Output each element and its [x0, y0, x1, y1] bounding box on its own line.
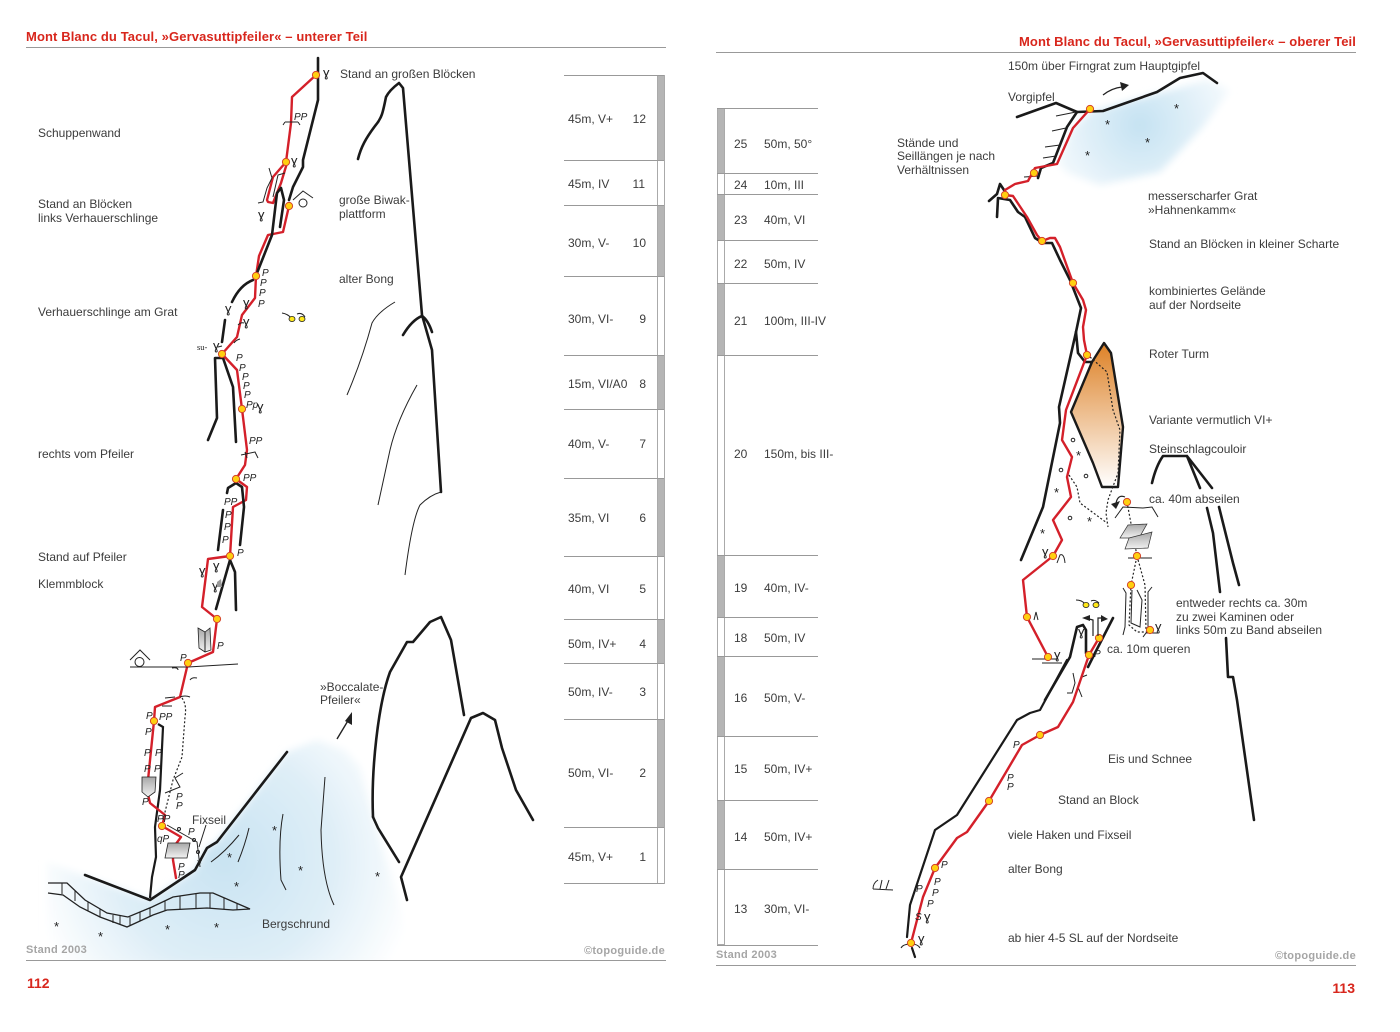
left page piton and sling symbols: Pp [246, 400, 259, 411]
left pitch table: 7 [639, 437, 646, 451]
left page labels: Pfeiler« [320, 693, 361, 707]
right pitch table: 24 [734, 178, 748, 192]
right page labels: zu zwei Kaminen oder [1176, 610, 1294, 624]
left page piton and sling symbols: P [225, 510, 232, 521]
right pitch table: 30m, VI- [764, 902, 809, 916]
right pitch table: 150m, bis III- [764, 447, 833, 461]
left pitch table: 2 [639, 766, 646, 780]
left page labels: links Verhauerschlinge [38, 211, 158, 225]
right page piton and sling symbols: P [1013, 740, 1020, 751]
left page footer: Stand 2003 [26, 944, 87, 956]
right pitch table: 14 [734, 830, 748, 844]
snow field: right page [1058, 80, 1230, 185]
snow stars left: * [197, 856, 202, 871]
right pitch table: 15 [734, 762, 748, 776]
left page piton and sling symbols: P [188, 827, 195, 838]
snow stars left: * [375, 869, 380, 884]
right page labels [897, 59, 1339, 945]
gray rock blocks left [142, 579, 222, 858]
left page piton and sling symbols: P [155, 748, 162, 759]
left page footer [26, 944, 666, 991]
left page labels: Verhauerschlinge am Grat [38, 305, 178, 319]
right pitch table: 18 [734, 631, 748, 645]
right pitch table: 50m, IV+ [764, 762, 812, 776]
right pitch table: 25 [734, 137, 748, 151]
left page labels: plattform [339, 207, 386, 221]
arrows right page [1082, 82, 1129, 636]
right page labels: alter Bong [1008, 862, 1063, 876]
left page belay stations [150, 71, 320, 830]
left pitch table: 11 [633, 177, 645, 191]
orange tower [1071, 343, 1123, 487]
snow stars left: * [165, 922, 170, 937]
right pitch table: 40m, VI [764, 213, 805, 227]
left pitch table: 1 [639, 850, 646, 864]
right page piton and sling symbols: P [932, 888, 939, 899]
left pitch table: 50m, IV+ [568, 637, 616, 651]
right page piton and sling symbols: P [1007, 773, 1014, 784]
left page piton and sling symbols: PP [159, 712, 173, 723]
chimneys sketch [873, 507, 1158, 948]
right page labels: Vorgipfel [1008, 90, 1055, 104]
left pitch table: 40m, V- [568, 437, 609, 451]
left page piton and sling symbols: ɣ [257, 399, 264, 414]
snow stars and small pebbles right: * [1105, 117, 1110, 132]
left page piton and sling symbols: ɣ [213, 558, 220, 573]
left page piton and sling symbols: P [142, 797, 149, 808]
right page labels: auf der Nordseite [1149, 298, 1241, 312]
right page footer: Stand 2003 [716, 949, 777, 961]
right page piton and sling symbols: ɣ [1078, 624, 1085, 639]
right page labels: links 50m zu Band abseilen [1176, 623, 1322, 637]
left page labels: Schuppenwand [38, 126, 121, 140]
right page piton and sling symbols: P [1007, 782, 1014, 793]
left page piton and sling symbols: P [259, 288, 266, 299]
right page labels: »Hahnenkamm« [1148, 203, 1236, 217]
snow stars left: * [272, 823, 277, 838]
right pitch table: 50m, IV [764, 631, 805, 645]
left page piton and sling symbols: P [180, 653, 187, 664]
snow stars and small pebbles right: * [1087, 514, 1092, 529]
left pitch table: 8 [639, 377, 646, 391]
right pitch table [717, 108, 833, 946]
right page labels: ca. 10m queren [1107, 642, 1190, 656]
left page piton and sling symbols: P [146, 711, 153, 722]
snow stars and small pebbles right: * [1174, 101, 1179, 116]
left page labels: Stand an Blöcken [38, 197, 132, 211]
right page piton and sling symbols [915, 544, 1162, 946]
left page labels: Klemmblock [38, 577, 104, 591]
left page piton and sling symbols: qP [157, 834, 170, 845]
right page piton and sling symbols: P [941, 860, 948, 871]
right pitch table: 50m, IV [764, 257, 805, 271]
right pitch table: 100m, III-IV [764, 314, 826, 328]
left pitch table: 50m, VI- [568, 766, 613, 780]
snow stars left: * [298, 863, 303, 878]
left pitch table: 5 [639, 582, 646, 596]
right page labels: entweder rechts ca. 30m [1176, 596, 1307, 610]
left page labels [38, 67, 475, 931]
left page piton and sling symbols: PP [224, 497, 238, 508]
right route red line [911, 109, 1099, 943]
left page labels: »Boccalate- [320, 680, 383, 694]
left page piton and sling symbols: P [144, 748, 151, 759]
right page footer [716, 949, 1356, 996]
left page labels: Stand an großen Blöcken [340, 67, 475, 81]
left page piton and sling symbols: P [176, 801, 183, 812]
right page labels: viele Haken und Fixseil [1008, 828, 1131, 842]
right pitch table: 16 [734, 691, 748, 705]
right page labels: ca. 40m abseilen [1149, 492, 1240, 506]
right page piton and sling symbols: ɣ [1054, 647, 1061, 662]
left page labels: Bergschrund [262, 917, 330, 931]
snow stars and small pebbles right [1040, 101, 1179, 541]
left pitch table [564, 75, 664, 884]
left page piton and sling symbols: ɣ [213, 338, 220, 353]
right page piton and sling symbols: P [1094, 649, 1101, 660]
snow field: left page [47, 740, 412, 965]
snow stars and small pebbles right: * [1076, 448, 1081, 463]
left page piton and sling symbols [142, 65, 330, 881]
right page piton and sling symbols: P [934, 877, 941, 888]
snow stars and small pebbles right: * [1085, 148, 1090, 163]
right page footer: 113 [1332, 980, 1355, 996]
left page labels: rechts vom Pfeiler [38, 447, 134, 461]
left page piton and sling symbols: PP [157, 814, 171, 825]
left page piton and sling symbols: ɣ [291, 153, 298, 168]
right pitch table: 22 [734, 257, 748, 271]
right pitch table: 21 [734, 314, 748, 328]
right page piton and sling symbols: S [915, 912, 922, 923]
left page piton and sling symbols: P [222, 535, 229, 546]
left page piton and sling symbols: P [224, 522, 231, 533]
snow stars left: * [227, 850, 232, 865]
left pitch table: 35m, VI [568, 511, 609, 525]
snow stars left [54, 823, 380, 944]
right page labels: messerscharfer Grat [1148, 189, 1258, 203]
left pitch table: 6 [639, 511, 646, 525]
left page piton and sling symbols: ɣ [225, 301, 232, 316]
snow stars and small pebbles right: * [1145, 135, 1150, 150]
left page piton and sling symbols: P [260, 278, 267, 289]
left page piton and sling symbols: ɣ [323, 65, 330, 80]
left page piton and sling symbols: PP [249, 436, 263, 447]
left page footer: 112 [27, 975, 50, 991]
left page labels: Stand auf Pfeiler [38, 550, 127, 564]
left page piton and sling symbols: P [244, 390, 251, 401]
right page labels: Verhältnissen [897, 163, 969, 177]
snow stars left: * [98, 929, 103, 944]
right page piton and sling symbols: ɣ [924, 909, 931, 924]
left page piton and sling symbols: P [262, 268, 269, 279]
snow stars left: * [214, 920, 219, 935]
left pitch table: 40m, VI [568, 582, 609, 596]
right page piton and sling symbols: ɣ [1155, 619, 1162, 634]
left pitch table: 10 [633, 236, 646, 250]
left pitch table: 4 [639, 637, 646, 651]
icon: bivouac left top [293, 191, 313, 207]
left page piton and sling symbols: P [178, 870, 185, 881]
icon: glasses right [1076, 600, 1099, 608]
snow stars left: * [234, 879, 239, 894]
left page piton and sling symbols: PP [243, 473, 257, 484]
dotted route variants [1069, 357, 1150, 632]
right pitch table: 19 [734, 581, 748, 595]
right pitch table: 50m, 50° [764, 137, 812, 151]
right page labels: 150m über Firngrat zum Hauptgipfel [1008, 59, 1200, 73]
right page labels: Stand an Block [1058, 793, 1140, 807]
left page piton and sling symbols: ɣ [212, 578, 219, 593]
left page piton and sling symbols: su- [197, 342, 208, 352]
left page piton and sling symbols: P [154, 764, 161, 775]
left page piton and sling symbols: ɣ [243, 295, 250, 310]
right pitch table: 40m, IV- [764, 581, 809, 595]
icon: glasses left [282, 313, 305, 322]
snow stars and small pebbles right: * [1040, 526, 1045, 541]
right page labels: Variante vermutlich VI+ [1149, 413, 1272, 427]
right page footer: ©topoguide.de [1275, 950, 1356, 962]
left pitch table: 30m, VI- [568, 312, 613, 326]
left page labels: alter Bong [339, 272, 394, 286]
right pitch table: 20 [734, 447, 748, 461]
left page rock lines along route [130, 58, 318, 867]
snow stars and small pebbles right: * [1054, 485, 1059, 500]
left page labels: Fixseil [192, 813, 226, 827]
right page piton and sling symbols: P [927, 899, 934, 910]
right page piton and sling symbols: ɣ [918, 931, 925, 946]
left page piton and sling symbols: ɣ [258, 207, 265, 222]
left page piton and sling symbols: P [258, 299, 265, 310]
left pitch table: 9 [639, 312, 646, 326]
left pitch table: 30m, V- [568, 236, 609, 250]
left page piton and sling symbols: ɣ [243, 314, 250, 329]
left pitch table: 15m, VI/A0 [568, 377, 628, 391]
left page piton and sling symbols: P [145, 727, 152, 738]
left page route: red line [147, 75, 316, 878]
right page piton and sling symbols: ɣ [1042, 544, 1049, 559]
icon: bivouac left bottom [130, 650, 150, 666]
arrow: Boccalate Pfeiler [337, 712, 352, 739]
left page labels: große Biwak- [339, 193, 410, 207]
left page piton and sling symbols: P [243, 381, 250, 392]
right page labels: Stände und [897, 136, 958, 150]
left page piton and sling symbols: PP [294, 112, 308, 123]
right page labels: ab hier 4-5 SL auf der Nordseite [1008, 931, 1179, 945]
right page labels: kombiniertes Gelände [1149, 284, 1266, 298]
left pitch table: 45m, IV [568, 177, 609, 191]
right pitch table: 23 [734, 213, 748, 227]
right page belay stations [907, 105, 1154, 947]
left page piton and sling symbols: P [178, 862, 185, 873]
right page labels: Seillängen je nach [897, 149, 995, 163]
right pitch table: 13 [734, 902, 748, 916]
right page labels: Roter Turm [1149, 347, 1209, 361]
left pitch table: 3 [639, 685, 646, 699]
right page labels: Stand an Blöcken in kleiner Scharte [1149, 237, 1339, 251]
right pitch table: 50m, IV+ [764, 830, 812, 844]
right page rock lines [907, 73, 1254, 957]
left pitch table: 45m, V+ [568, 850, 613, 864]
left page piton and sling symbols: P [217, 641, 224, 652]
right page piton and sling symbols: P [916, 884, 923, 895]
left page piton and sling symbols: P [239, 363, 246, 374]
right page labels: Steinschlagcouloir [1149, 442, 1246, 456]
left mountain outlines [211, 83, 533, 905]
left page piton and sling symbols: P [144, 764, 151, 775]
left page piton and sling symbols: P [237, 548, 244, 559]
gray rock blocks right [1120, 524, 1152, 549]
right pitch table: 10m, III [764, 178, 804, 192]
right pitch table: 50m, V- [764, 691, 805, 705]
snow stars left: * [54, 919, 59, 934]
left page footer: ©topoguide.de [584, 945, 665, 957]
glacier ridge and bergschrund [48, 724, 287, 927]
left page piton and sling symbols: ɣ [199, 563, 206, 578]
left page piton and sling symbols: P [176, 792, 183, 803]
left page piton and sling symbols: P [242, 372, 249, 383]
left page header: Mont Blanc du Tacul, »Gervasuttipfeiler« – unterer Teil [26, 29, 367, 44]
right page header: Mont Blanc du Tacul, »Gervasuttipfeiler« – oberer Teil [1019, 34, 1356, 49]
left pitch table: 45m, V+ [568, 112, 613, 126]
left page piton and sling symbols: P [236, 353, 243, 364]
left pitch table: 50m, IV- [568, 685, 613, 699]
left pitch table: 12 [633, 112, 646, 126]
right page labels: Eis und Schnee [1108, 752, 1192, 766]
